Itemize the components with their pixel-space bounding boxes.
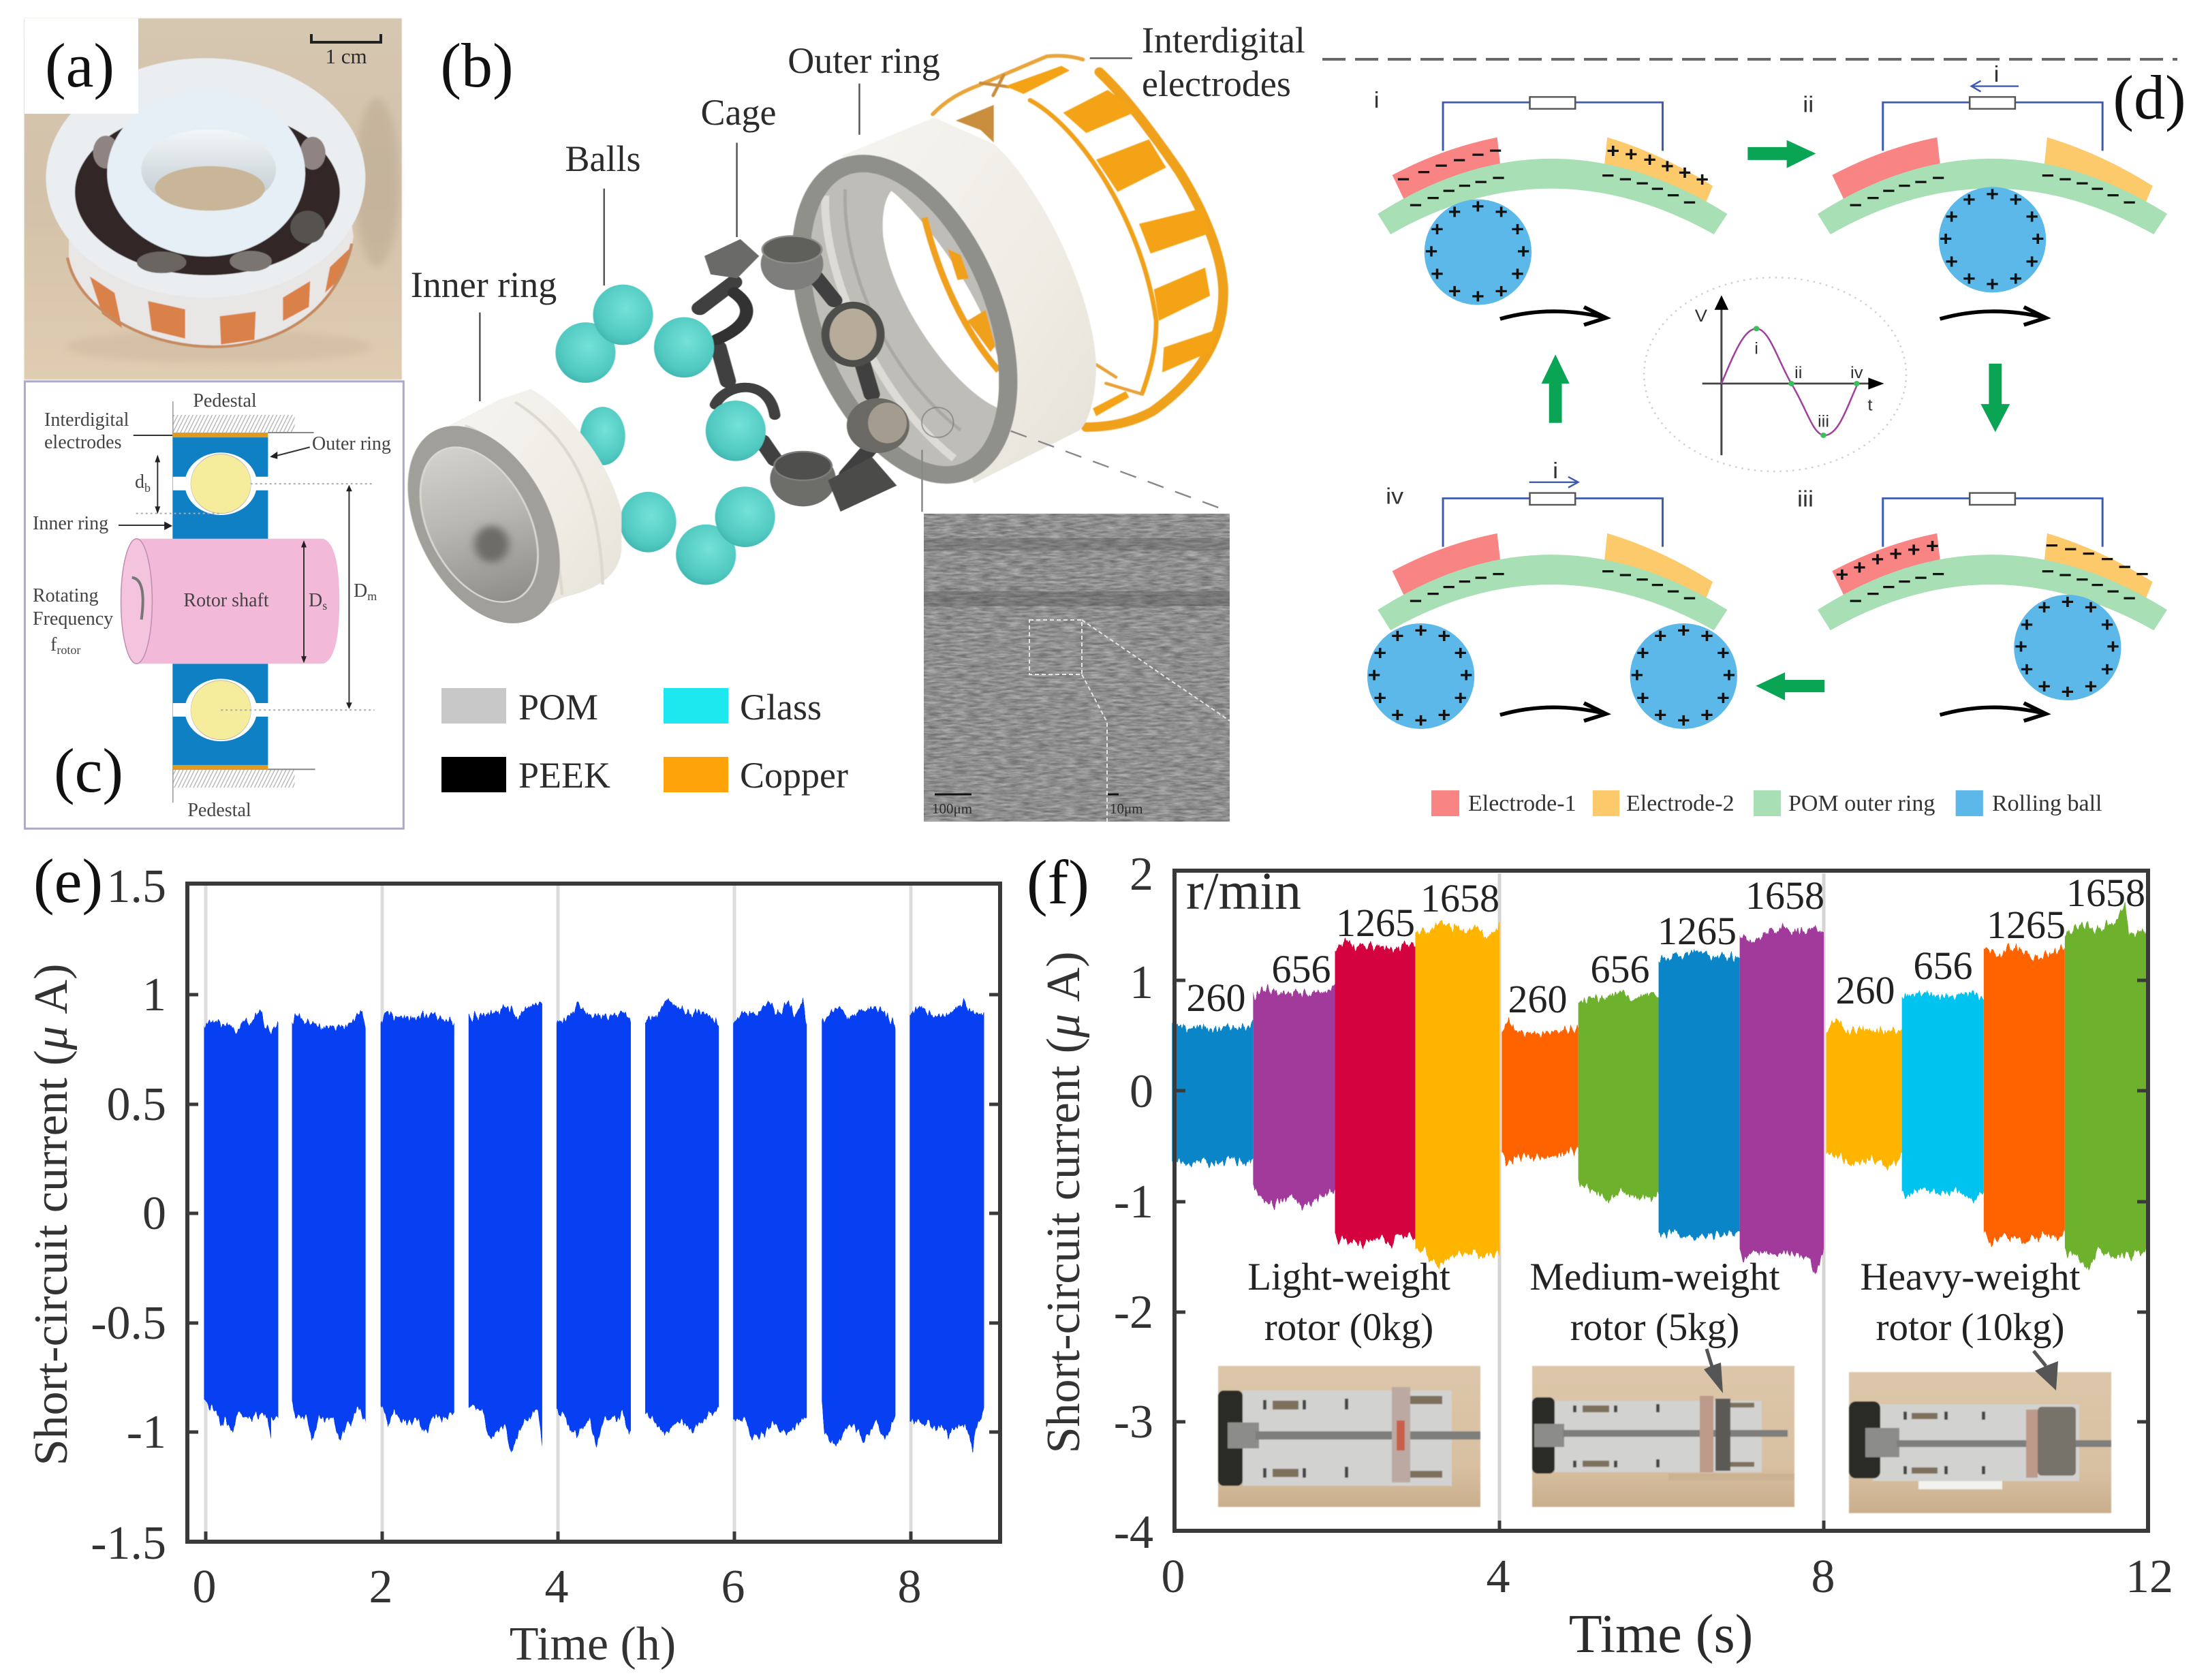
y axis title: Short-circuit current (μ A) xyxy=(1038,952,1090,1453)
label: pedestal top: Pedestal xyxy=(193,390,257,411)
central voltage waveform: t xyxy=(1867,396,1873,414)
y axis ticks xyxy=(91,860,166,1570)
panel a: bearing photo xyxy=(24,18,402,379)
state iii xyxy=(1797,487,2167,721)
y axis title: Short-circuit current (μ A) xyxy=(25,964,78,1465)
x axis ticks: 12 xyxy=(2126,1551,2173,1603)
speed labels: light rotor: 1658 xyxy=(1420,876,1499,920)
state ii: ii xyxy=(1803,93,1814,117)
state ii: ++++++++++++ xyxy=(1940,183,2044,296)
x axis ticks: 8 xyxy=(898,1561,921,1613)
state ii: −−−−−− xyxy=(2041,164,2136,214)
label: rotor shaft: Rotor shaft xyxy=(183,590,269,611)
arrow: iii to iv xyxy=(1756,672,1824,700)
state iii: −−−−−− xyxy=(1849,563,1944,612)
speed labels: medium rotor xyxy=(1508,873,1824,1021)
scale bar: 1 cm xyxy=(325,44,367,68)
state iii: ++++++ xyxy=(1835,534,1939,586)
x axis ticks: 8 xyxy=(1811,1551,1835,1603)
SEM micrograph inset xyxy=(924,514,1230,822)
x axis title: Time (h) xyxy=(510,1618,676,1670)
speed labels: heavy rotor: 1265 xyxy=(1987,903,2066,947)
state i: −−−−−− xyxy=(1602,164,1696,214)
label: shaft diameter: D xyxy=(309,590,322,611)
cage, balls and inner ring xyxy=(378,236,909,640)
label (a) white box xyxy=(25,18,138,114)
state i: −−−−−− xyxy=(1397,139,1502,191)
y axis ticks: -0.5 xyxy=(91,1297,166,1350)
state i xyxy=(1374,88,1727,325)
legend: rolling ball: Rolling ball xyxy=(1992,791,2102,816)
interdigital copper band and outer ring xyxy=(760,56,1224,501)
photo: medium rotor xyxy=(1532,1366,1794,1507)
heading (b): (b) xyxy=(440,31,514,100)
speed labels: light rotor: 656 xyxy=(1271,947,1331,991)
state iv: i xyxy=(1553,458,1558,484)
x axis ticks xyxy=(192,1561,921,1613)
arrow: i to ii xyxy=(1747,140,1816,168)
y axis ticks: -3 xyxy=(1114,1396,1153,1448)
heading (c): (c) xyxy=(54,736,123,805)
heading (a): (a) xyxy=(45,31,114,100)
caption: light rotor: Light-weight xyxy=(1247,1256,1450,1298)
speed labels: light rotor: 1265 xyxy=(1336,901,1415,945)
arrow: medium rotor pointer xyxy=(1704,1349,1723,1393)
y axis ticks: -2 xyxy=(1114,1286,1153,1339)
legend: materials: PEEK xyxy=(518,755,610,796)
arrow: ii to iii xyxy=(1980,364,2010,432)
scale bar xyxy=(311,34,381,68)
y axis ticks: -1.5 xyxy=(91,1517,166,1570)
central voltage waveform: i xyxy=(1754,340,1758,358)
speed labels: heavy rotor: 260 xyxy=(1835,968,1895,1012)
y axis ticks: 0 xyxy=(1130,1065,1153,1118)
state iv: ++++++++++++ xyxy=(1368,619,1473,732)
y axis ticks: 2 xyxy=(1130,848,1153,901)
speed labels: light rotor: 260 xyxy=(1187,976,1245,1020)
speed labels: heavy rotor: 656 xyxy=(1913,944,1973,988)
y axis ticks: 1 xyxy=(1130,956,1153,1009)
state iii: −−−−−− xyxy=(2041,560,2136,610)
label: rotating frequency: Rotating xyxy=(33,585,98,606)
x axis ticks: 6 xyxy=(721,1561,745,1613)
arrow: iv to i xyxy=(1542,354,1570,423)
chart frame and ticks xyxy=(187,884,1000,1542)
speed labels: light rotor xyxy=(1187,876,1499,1020)
photo: light rotor xyxy=(1218,1366,1480,1507)
heading (f): (f) xyxy=(1027,847,1089,917)
state i: −−−−−− xyxy=(1409,166,1505,217)
caption: heavy rotor: Heavy-weight xyxy=(1861,1256,2081,1298)
state iv: −−−−−− xyxy=(1409,563,1505,612)
label: inner ring: Inner ring xyxy=(411,264,557,305)
grid lines xyxy=(206,886,911,1540)
heading (e): (e) xyxy=(33,846,103,916)
x axis ticks: 4 xyxy=(1487,1551,1510,1603)
legend: electrode-1: Electrode-1 xyxy=(1468,791,1576,816)
label: rotating frequency: rotor xyxy=(57,643,80,657)
label: rotating frequency: f xyxy=(50,634,57,655)
label: inner ring: Inner ring xyxy=(33,513,108,534)
panel e: stability chart xyxy=(25,846,1000,1670)
label: ball diameter: d xyxy=(135,471,144,493)
state iv: −−−−−− xyxy=(1602,560,1696,610)
current bursts by speed and rotor xyxy=(1172,901,2148,1279)
current bursts xyxy=(204,998,984,1452)
state i: ++++++++++++ xyxy=(1425,195,1530,308)
speed labels: medium rotor: 656 xyxy=(1590,947,1650,991)
state ii xyxy=(1803,62,2167,325)
central voltage waveform: iv xyxy=(1850,364,1863,382)
central voltage waveform xyxy=(1644,277,1906,471)
label: ball diameter: b xyxy=(144,481,151,495)
speed labels: heavy rotor xyxy=(1835,871,2145,1012)
legend: materials xyxy=(441,687,848,796)
panel c: bearing cross-section schematic xyxy=(25,382,403,828)
label: mean diameter: D xyxy=(354,580,367,602)
panel f: rotor weight chart xyxy=(1027,847,2173,1664)
state iii: ++++++++++++ xyxy=(2015,591,2119,703)
caption: heavy rotor: rotor (10kg) xyxy=(1876,1306,2065,1349)
state i: i xyxy=(1374,88,1380,113)
speed labels: medium rotor: 260 xyxy=(1508,977,1567,1021)
label: interdigital electrodes: electrodes xyxy=(44,432,121,453)
speed labels: heavy rotor: 1658 xyxy=(2066,871,2145,915)
state iii: −−−−−− xyxy=(2045,534,2149,585)
panel b: exploded bearing view xyxy=(378,20,1305,822)
central voltage waveform: ii xyxy=(1794,364,1802,382)
y axis ticks xyxy=(1114,848,1153,1559)
label: outer ring: Outer ring xyxy=(788,40,940,81)
arrow: heavy rotor pointer xyxy=(2034,1351,2058,1390)
label: pedestal bottom: Pedestal xyxy=(187,800,251,821)
x axis ticks xyxy=(1161,1551,2173,1603)
legend: materials: Glass xyxy=(740,687,822,728)
label: interdigital electrodes: electrodes xyxy=(1142,63,1291,104)
state i: ++++++ xyxy=(1606,140,1709,191)
state ii: i xyxy=(1994,62,2000,87)
state iv: ++++++++++++ xyxy=(1630,619,1735,732)
legend: materials: POM xyxy=(518,687,598,728)
panel d: working mechanism xyxy=(1322,59,2186,816)
speed labels: medium rotor: 1265 xyxy=(1658,909,1737,953)
label: cage: Cage xyxy=(701,92,776,133)
y axis ticks: -4 xyxy=(1114,1506,1153,1559)
caption: light rotor: rotor (0kg) xyxy=(1264,1306,1433,1349)
caption: medium rotor: rotor (5kg) xyxy=(1570,1306,1739,1349)
y axis ticks: 0 xyxy=(142,1187,166,1240)
heading (d): (d) xyxy=(2113,63,2186,132)
speed labels: medium rotor: 1658 xyxy=(1745,873,1824,918)
legend: electrode-2: Electrode-2 xyxy=(1626,791,1735,816)
legend: POM outer ring: POM outer ring xyxy=(1788,791,1935,816)
label: shaft diameter: s xyxy=(322,599,327,612)
x axis title: Time (s) xyxy=(1569,1604,1753,1664)
y axis ticks: 0.5 xyxy=(106,1078,166,1131)
label: mean diameter: m xyxy=(367,589,377,603)
label: interdigital electrodes: Interdigital xyxy=(44,409,129,431)
y axis ticks: -1 xyxy=(127,1406,166,1459)
x axis ticks: 2 xyxy=(369,1561,392,1613)
x axis ticks: 0 xyxy=(192,1561,217,1613)
unit label: r/min xyxy=(1186,861,1301,920)
label: balls: Balls xyxy=(565,138,641,179)
state iv xyxy=(1367,458,1737,732)
SEM micrograph inset: 10μm xyxy=(1110,800,1143,817)
y axis ticks: 1.5 xyxy=(106,860,166,913)
photo: heavy rotor xyxy=(1849,1372,2111,1513)
state iv: iv xyxy=(1386,484,1404,509)
dividers xyxy=(1499,873,1824,1529)
caption: medium rotor: Medium-weight xyxy=(1529,1256,1780,1298)
label: rotating frequency: Frequency xyxy=(33,608,113,629)
state iii: iii xyxy=(1797,487,1814,512)
leader lines xyxy=(480,58,1230,512)
x axis ticks: 4 xyxy=(545,1561,568,1613)
label: interdigital electrodes: Interdigital xyxy=(1142,20,1305,61)
central voltage waveform: V xyxy=(1695,306,1707,326)
central voltage waveform: iii xyxy=(1818,413,1829,431)
x axis ticks: 0 xyxy=(1161,1551,1185,1603)
SEM micrograph inset: 100μm xyxy=(932,800,972,817)
chart frame and ticks xyxy=(1175,871,2148,1531)
y axis ticks: -1 xyxy=(1114,1176,1153,1228)
label: outer ring: Outer ring xyxy=(312,433,391,454)
legend: materials: Copper xyxy=(740,755,848,796)
y axis ticks: 1 xyxy=(142,969,166,1021)
dashed zoom line xyxy=(1322,58,2177,61)
state ii: −−−−−− xyxy=(1849,166,1944,217)
